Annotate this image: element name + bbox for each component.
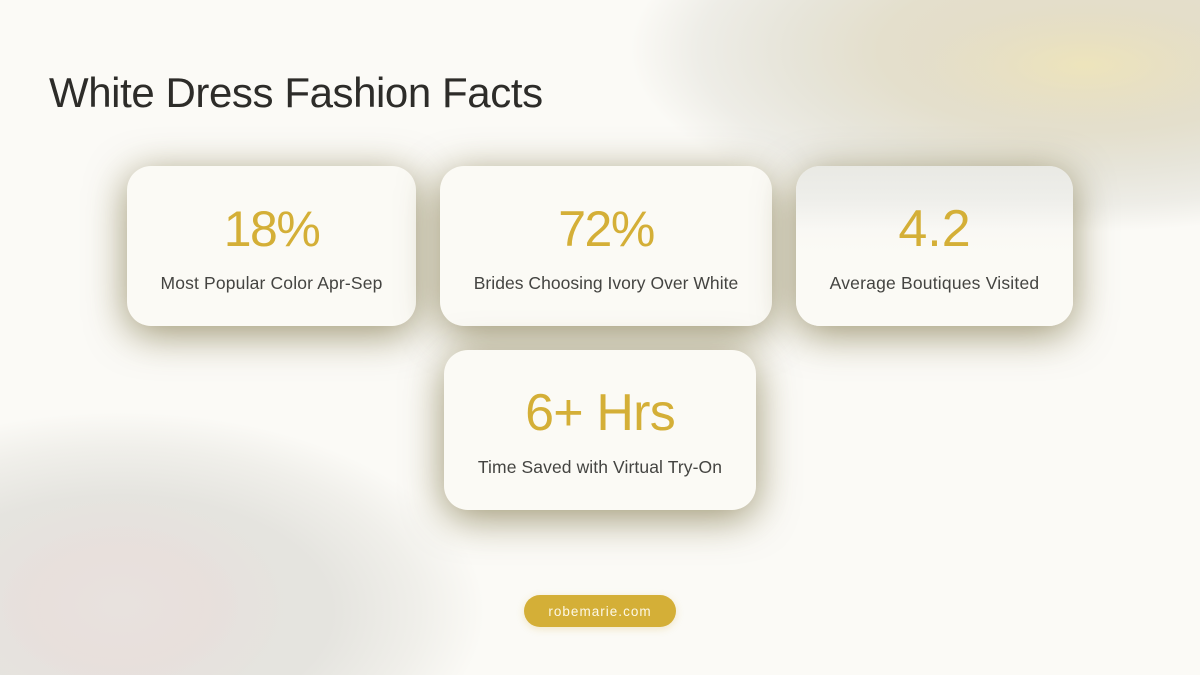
card: 6+ Hrs: 6+ Hrs [525, 384, 675, 442]
card: 72%: 72% [558, 201, 654, 257]
card: 18% [127, 166, 416, 326]
card: 4.2 [796, 166, 1073, 326]
title: White Dress Fashion Facts [49, 69, 543, 116]
card: 4.2: Average Boutiques Visited [830, 273, 1039, 293]
website badge [524, 595, 676, 627]
card: 72%: Brides Choosing Ivory Over White [474, 273, 738, 293]
card: 18%: 18% [224, 201, 319, 257]
card: 4.2: 4.2 [898, 200, 971, 258]
card: 6+ Hrs [444, 350, 756, 510]
card: 72% [440, 166, 772, 326]
website badge: robemarie.com [548, 604, 652, 619]
card: 18%: Most Popular Color Apr-Sep [160, 273, 383, 293]
card: 6+ Hrs: Time Saved with Virtual Try-On [478, 457, 722, 477]
